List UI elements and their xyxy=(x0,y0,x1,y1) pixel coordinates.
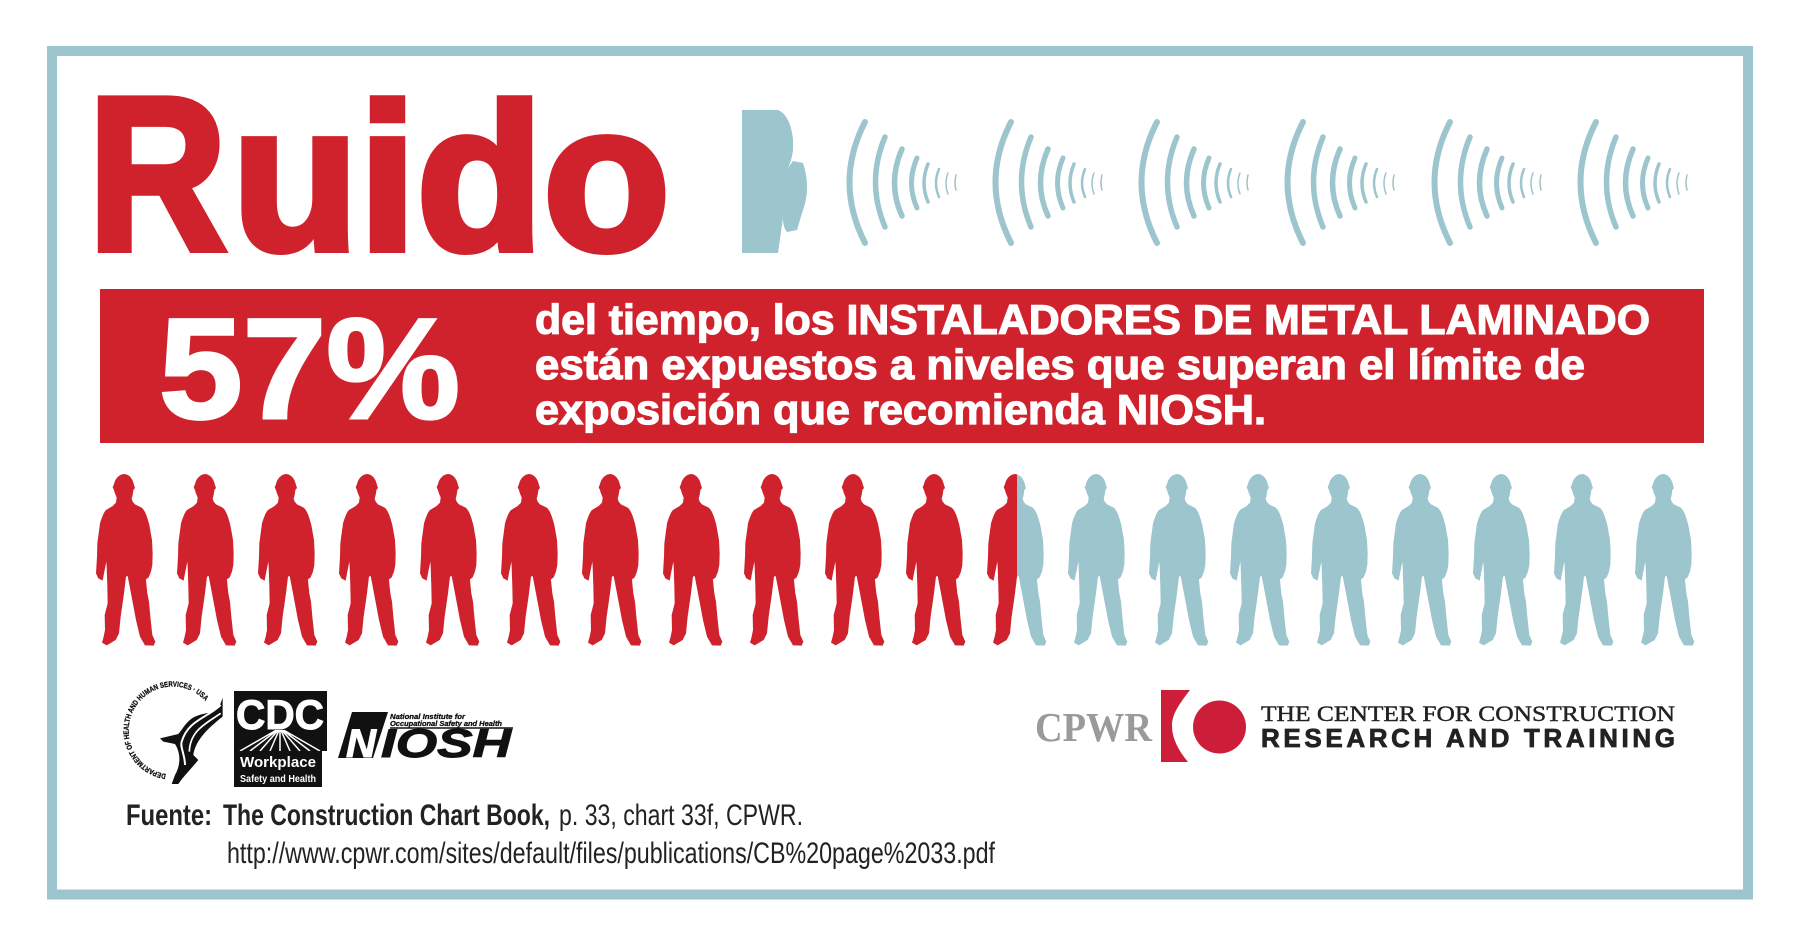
pictogram: row of 20 workers, 57% red xyxy=(96,474,1694,646)
source note: Fuente: xyxy=(126,799,212,832)
statistic text: están expuestos a niveles que superan el límite de xyxy=(535,341,1585,388)
logo: CDC Workplace Safety and Health: CDC xyxy=(236,691,324,738)
organisation name: THE CENTER FOR CONSTRUCTION xyxy=(1261,701,1675,726)
red workers xyxy=(96,474,1046,646)
blue workers xyxy=(987,474,1694,646)
logo: HHS seal: DEPARTMENT OF HEALTH AND HUMAN SERVICES · USA xyxy=(123,681,208,780)
big number: 57% xyxy=(159,290,460,449)
logo: CDC Workplace Safety and Health: Workplace xyxy=(240,754,316,771)
icon: sound waves xyxy=(850,122,1687,243)
source note xyxy=(126,799,996,870)
logo: CPWR: RESEARCH AND TRAINING xyxy=(1261,723,1675,753)
icon: ear xyxy=(742,110,807,253)
logo: NIOSH xyxy=(338,712,513,766)
logo: NIOSH: IOSH xyxy=(381,722,512,766)
source note: http://www.cpwr.com/sites/default/files/publications/CB%20page%2033.pdf xyxy=(227,837,996,870)
icon: ear and sound waves xyxy=(742,110,1687,253)
logo: NIOSH: N xyxy=(346,722,377,766)
source note: The Construction Chart Book, xyxy=(223,799,550,832)
statistic text xyxy=(535,296,1650,433)
logo: NIOSH: National Institute for xyxy=(390,712,466,721)
logo: CDC Workplace Safety and Health xyxy=(234,691,327,787)
logo: CPWR xyxy=(1035,690,1675,762)
statistic text: exposición que recomienda NIOSH. xyxy=(535,386,1266,433)
title: R xyxy=(88,52,227,296)
logo: CDC Workplace Safety and Health: Safety and Health xyxy=(240,774,316,785)
logo: NIOSH: Occupational Safety and Health xyxy=(390,719,502,728)
source note: p. 33, chart 33f, CPWR. xyxy=(559,799,803,832)
statistic text: del tiempo, los INSTALADORES DE METAL LAMINADO xyxy=(535,296,1650,343)
icon: bracket and circle xyxy=(1161,690,1190,762)
panel: red statistic band xyxy=(100,289,1704,449)
wordmark: CPWR xyxy=(1035,704,1152,750)
title: uido xyxy=(232,62,670,294)
